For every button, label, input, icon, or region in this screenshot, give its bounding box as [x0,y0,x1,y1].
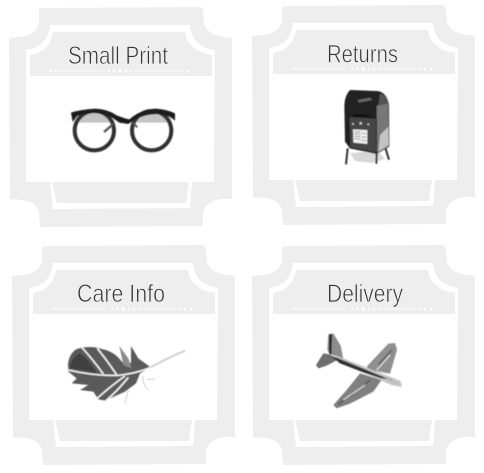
icon: feather [68,346,185,403]
panel: returns [252,5,475,225]
icon: glasses [71,109,175,150]
divider: returns [293,67,432,71]
frame: care info [12,245,235,465]
frame: small print [9,7,232,227]
divider: delivery [293,307,432,311]
frame: returns [252,5,475,225]
heading: delivery: Delivery [327,280,403,308]
divider: small print [50,69,189,73]
icon: mailbox [344,90,389,164]
panel: small print [9,7,232,227]
heading: small print: Small Print [68,42,168,70]
heading: care info: Care Info [77,280,165,308]
divider: care info [53,307,192,311]
frame: delivery [252,245,475,465]
icon: airplane [316,333,402,408]
panel: delivery [252,245,475,465]
heading: returns: Returns [327,40,398,68]
panel: care info [12,245,235,465]
